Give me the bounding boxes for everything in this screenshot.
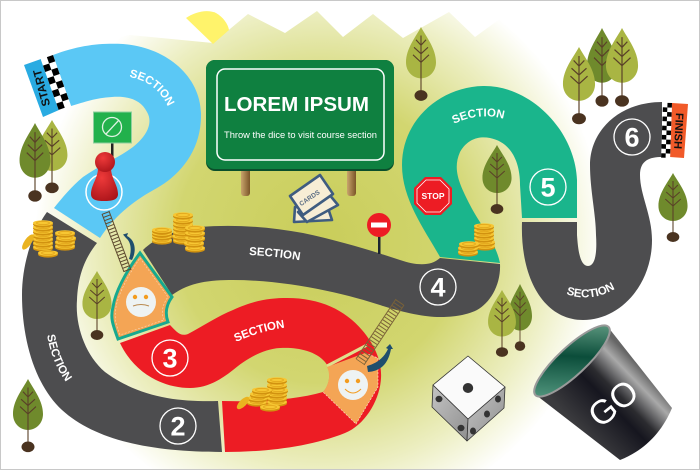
number 4 xyxy=(420,269,456,305)
road section: grey 4 xyxy=(143,226,500,317)
number 5: 5 xyxy=(540,172,556,202)
dice cup: GO xyxy=(581,372,646,435)
section labels: SECTION xyxy=(48,334,72,382)
trees: top right group xyxy=(563,28,638,124)
number 6: 6 xyxy=(624,122,640,152)
cards: CARDS xyxy=(298,189,322,208)
billboard sign: Throw the dice to visit course section xyxy=(224,130,377,141)
tree: left dark and light xyxy=(20,120,67,202)
tree: lower left xyxy=(13,379,43,452)
tree: beside sad square xyxy=(82,271,112,340)
cards xyxy=(290,175,338,222)
number 3 xyxy=(152,340,188,376)
road section: blue start xyxy=(53,44,201,238)
number 6 xyxy=(614,119,650,155)
player pawn xyxy=(86,152,122,210)
road section: grey 6 xyxy=(522,102,662,320)
happy square xyxy=(323,345,378,424)
road section: teal 5 xyxy=(402,86,577,263)
number 5 xyxy=(530,169,566,205)
small green sign xyxy=(94,112,132,157)
number 4: 4 xyxy=(430,272,446,302)
trees: centre right pair xyxy=(488,284,532,357)
start flag xyxy=(24,55,71,117)
start flag: START xyxy=(32,68,53,107)
coins: road 4 xyxy=(152,212,205,253)
sad square xyxy=(112,253,172,339)
road section: red 3 xyxy=(120,298,381,452)
stop sign xyxy=(414,177,452,215)
coins: teal road xyxy=(458,223,495,257)
arrow: upper xyxy=(123,233,135,260)
billboard sign: LOREM IPSUM xyxy=(224,94,369,116)
ladder: lower xyxy=(356,299,404,365)
number 2 xyxy=(160,408,196,444)
finish flag: FINISH xyxy=(671,113,685,149)
tree: top centre xyxy=(406,27,436,101)
section labels xyxy=(48,70,614,382)
section labels: SECTION xyxy=(452,108,505,123)
no entry sign xyxy=(367,213,391,254)
section labels: SECTION xyxy=(234,320,284,341)
section labels: SECTION xyxy=(250,247,300,260)
dice xyxy=(432,356,505,441)
tree: right xyxy=(658,173,688,242)
tree: inside teal loop xyxy=(482,145,512,214)
finish flag xyxy=(661,103,688,158)
ladder: upper xyxy=(102,211,131,272)
section labels: SECTION xyxy=(130,70,175,106)
coins: upper left xyxy=(20,220,76,258)
arrow: lower xyxy=(367,344,393,372)
icon: sun xyxy=(186,11,229,44)
number 3: 3 xyxy=(162,344,178,374)
billboard sign xyxy=(206,60,394,196)
coins: red road xyxy=(235,377,288,412)
road section: grey 2 xyxy=(22,212,222,452)
dice cup xyxy=(526,317,672,460)
section labels: SECTION xyxy=(567,282,614,298)
number 2: 2 xyxy=(170,412,186,442)
stop sign: STOP xyxy=(422,191,445,201)
